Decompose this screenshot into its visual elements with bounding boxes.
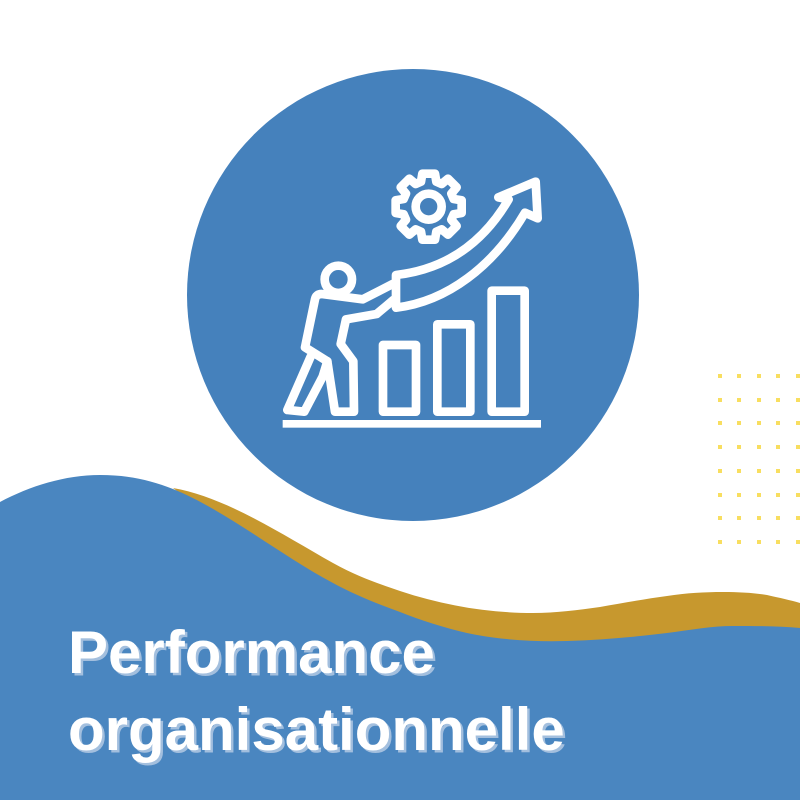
background circle: [187, 69, 639, 521]
dot pattern: [718, 374, 800, 544]
icon: gear: [396, 174, 462, 240]
icon: person: [287, 266, 393, 412]
icon: person pushing growth arrow above bar chart: [283, 174, 541, 428]
ground line: [283, 420, 541, 428]
bar chart: [383, 291, 525, 412]
gold wave: [173, 488, 800, 660]
title: Performance: [68, 619, 435, 686]
icon: growth arrow: [396, 182, 538, 308]
title: organisationnelle: [68, 696, 565, 763]
blue wave: [0, 475, 800, 800]
